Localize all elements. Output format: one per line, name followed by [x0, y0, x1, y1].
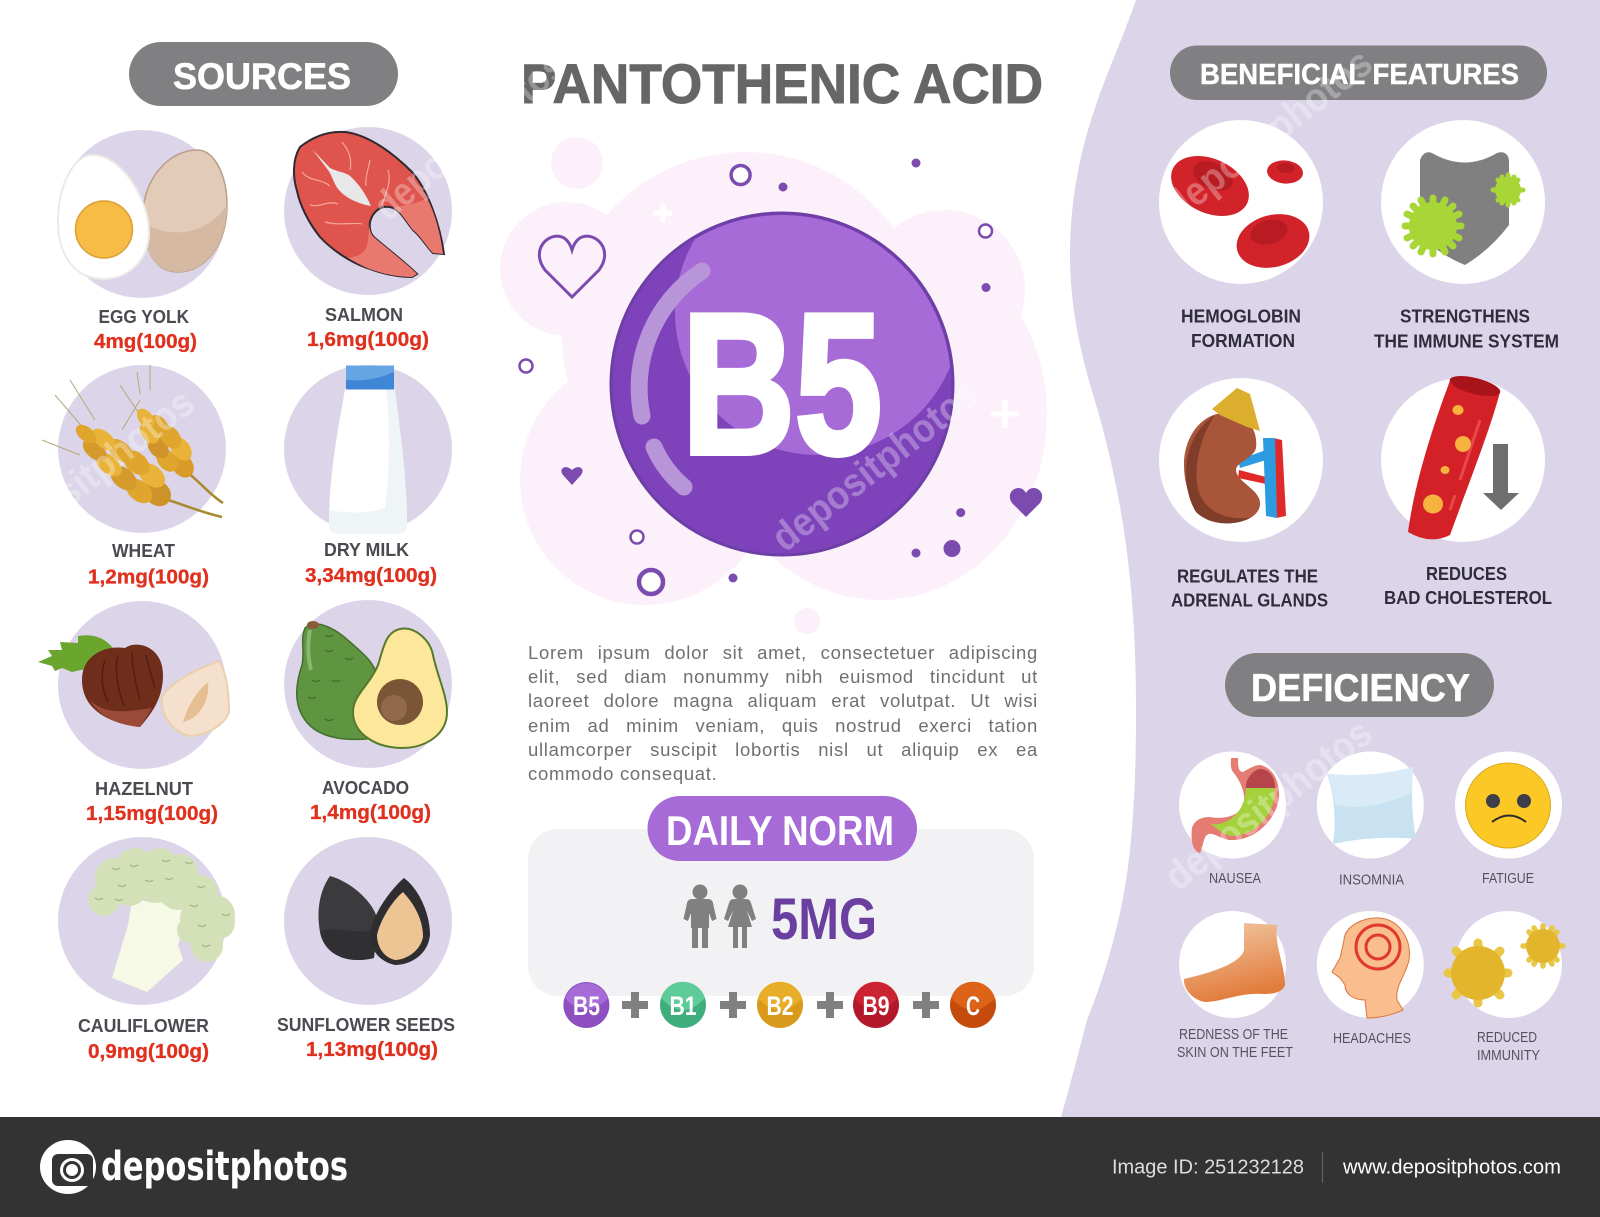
item: egg yolk: EGG YOLK — [98, 306, 190, 327]
text block: description: commodo consequat. — [528, 763, 717, 784]
heading: daily norm: DAILY NORM — [666, 807, 894, 854]
item: reduced immunity: REDUCED — [1477, 1030, 1537, 1046]
item: reduced immunity: IMMUNITY — [1477, 1048, 1540, 1064]
item: sunflower seeds — [277, 837, 455, 1061]
item: reduces bad cholesterol: REDUCES — [1426, 563, 1507, 584]
text block: description: laoreet dolore magna aliquam erat volutpat. Ut wisi — [528, 690, 1038, 711]
item: dry milk: 3,34mg(100g) — [305, 565, 437, 587]
vitamin combination row: B9 — [862, 991, 890, 1021]
item: insomnia — [1317, 752, 1424, 888]
item: avocado — [284, 600, 452, 824]
item: dry milk — [284, 365, 452, 587]
item: dry milk: DRY MILK — [324, 539, 410, 560]
item: headaches — [1317, 911, 1424, 1047]
image id: Image ID: 251232128 — [1112, 1156, 1304, 1178]
item: cauliflower: CAULIFLOWER — [78, 1015, 209, 1036]
illustration: B5 bubble — [500, 137, 1047, 634]
title: PANTOTHENIC ACID — [521, 52, 1043, 115]
panel: deficiency — [1177, 653, 1563, 1064]
panel: sources — [38, 42, 455, 1063]
item: salmon: SALMON — [325, 304, 403, 325]
item: salmon: 1,6mg(100g) — [307, 329, 429, 351]
item: nausea: NAUSEA — [1209, 871, 1261, 887]
logo wordmark: depositphotos — [101, 1144, 348, 1190]
item: avocado: 1,4mg(100g) — [310, 802, 431, 824]
item: regulates the adrenal glands — [1159, 378, 1328, 610]
text block: description: Lorem ipsum dolor sit amet, consectetuer adipiscing — [528, 642, 1038, 663]
item: regulates the adrenal glands: ADRENAL GLANDS — [1171, 590, 1328, 610]
item: hazelnut — [38, 601, 229, 825]
heading: sources — [129, 42, 398, 106]
icon: camera logo — [40, 1140, 96, 1194]
heading: beneficial features — [1170, 46, 1547, 100]
footer bar — [0, 1117, 1600, 1217]
daily amount: 5MG — [771, 887, 877, 952]
item: fatigue: FATIGUE — [1482, 871, 1534, 887]
item: cauliflower: 0,9mg(100g) — [88, 1041, 209, 1063]
item: sunflower seeds: SUNFLOWER SEEDS — [277, 1014, 455, 1035]
text block: description — [528, 642, 1038, 784]
vitamin combination row: C — [966, 991, 980, 1021]
text block: description: elit, sed diam nonummy nibh euismod tincidunt ut — [528, 666, 1038, 687]
bubble body: depositphotos — [763, 372, 988, 560]
item: wheat: 1,2mg(100g) — [88, 566, 209, 588]
item: hazelnut: HAZELNUT — [95, 778, 194, 799]
item: egg yolk: 4mg(100g) — [94, 331, 197, 353]
item: strengthens the immune system — [1374, 120, 1559, 352]
item: reduces bad cholesterol: BAD CHOLESTEROL — [1384, 587, 1552, 608]
item: fatigue — [1455, 752, 1562, 887]
item: cauliflower — [58, 837, 235, 1063]
bubble body: B5 — [682, 273, 882, 496]
vitamin combination row: B5 — [573, 991, 600, 1021]
watermarks: depositphotos — [1156, 711, 1381, 899]
panel: lilac right background — [1061, 0, 1600, 1117]
heading: daily norm — [648, 796, 917, 861]
item: insomnia: INSOMNIA — [1339, 872, 1404, 888]
vitamin combination row: B1 — [670, 991, 696, 1021]
panel: beneficial features — [1159, 46, 1559, 610]
watermarks: depositphotos — [366, 44, 574, 229]
item: wheat: WHEAT — [112, 540, 176, 561]
heading: deficiency: DEFICIENCY — [1251, 667, 1470, 710]
item: reduced immunity — [1448, 911, 1563, 1064]
item: strengthens the immune system: THE IMMUNE SYSTEM — [1374, 330, 1559, 352]
item: wheat — [42, 365, 226, 588]
bubble body — [610, 212, 954, 556]
item: salmon — [284, 127, 452, 351]
watermarks: depositphotos — [1156, 41, 1381, 229]
website: www.depositphotos.com — [1342, 1156, 1561, 1178]
panel: daily norm — [528, 796, 1034, 1028]
heading: deficiency — [1225, 653, 1494, 717]
item: redness of the skin on the feet: SKIN ON THE FEET — [1177, 1045, 1293, 1061]
item: hemoglobin formation — [1159, 120, 1323, 351]
text block: description: enim ad minim veniam, quis nostrud exerci tation — [528, 715, 1038, 736]
item: avocado: AVOCADO — [322, 777, 409, 798]
item: headaches: HEADACHES — [1333, 1031, 1411, 1047]
item: egg yolk — [58, 130, 227, 353]
item: regulates the adrenal glands: REGULATES THE — [1177, 566, 1318, 586]
text block: description: ullamcorper suscipit lobortis nisl ut aliquip ex ea — [528, 739, 1038, 760]
heading: beneficial features: BENEFICIAL FEATURES — [1200, 59, 1519, 91]
item: nausea — [1179, 752, 1286, 887]
item: hemoglobin formation: FORMATION — [1191, 330, 1295, 351]
item: redness of the skin on the feet: REDNESS OF THE — [1179, 1027, 1288, 1043]
decorative dots, rings and hearts — [520, 158, 1042, 594]
icon: man and woman — [684, 884, 756, 948]
heading: sources: SOURCES — [173, 56, 351, 97]
item: reduces bad cholesterol — [1381, 372, 1552, 608]
item: redness of the skin on the feet — [1177, 911, 1293, 1061]
watermarks — [0, 41, 1381, 899]
vitamin combination row: B2 — [766, 991, 794, 1021]
item: hemoglobin formation: HEMOGLOBIN — [1181, 306, 1301, 326]
vitamin combination row — [563, 982, 996, 1028]
item: sunflower seeds: 1,13mg(100g) — [306, 1039, 438, 1061]
item: hazelnut: 1,15mg(100g) — [86, 803, 218, 825]
item: strengthens the immune system: STRENGTHENS — [1400, 306, 1530, 326]
